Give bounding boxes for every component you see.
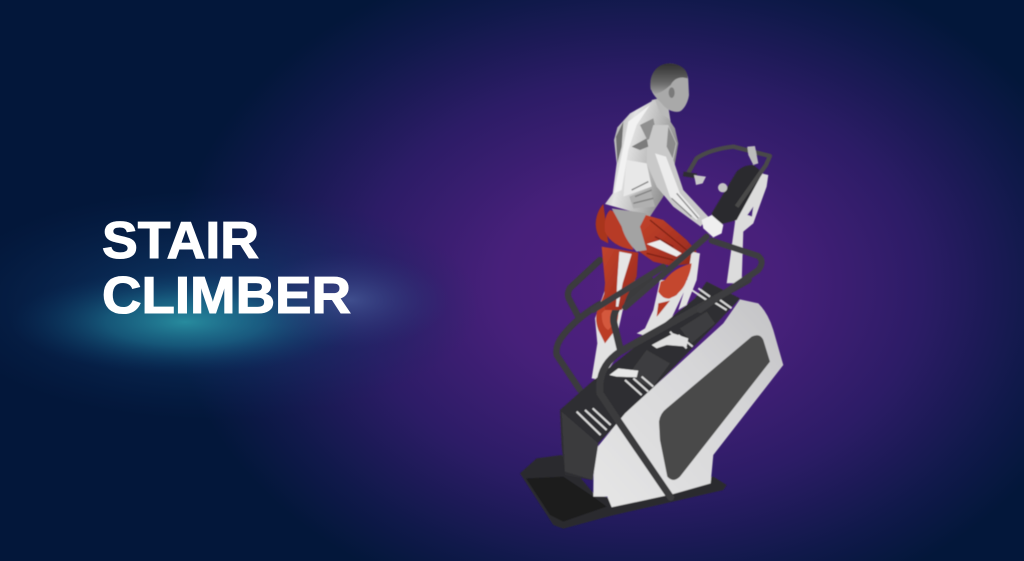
lower front leg	[637, 279, 695, 337]
hand	[702, 215, 723, 237]
head	[651, 63, 689, 112]
rear thigh tendon	[616, 252, 632, 307]
cutout in frame	[747, 207, 753, 217]
grip end	[694, 175, 706, 185]
mid step pads	[628, 312, 715, 388]
athlete upper body	[596, 63, 723, 310]
foot on upper step	[652, 333, 688, 348]
machine	[526, 282, 783, 522]
rear handrail	[556, 260, 650, 390]
back muscles	[614, 105, 657, 208]
console post and console	[683, 146, 770, 283]
step tread stripes	[577, 288, 732, 435]
console frame	[727, 173, 768, 283]
shell	[593, 299, 783, 507]
machine base	[520, 455, 727, 529]
ear	[669, 87, 675, 98]
torso	[605, 99, 678, 217]
calf	[660, 263, 692, 297]
console screen	[712, 165, 763, 224]
step block	[560, 282, 740, 480]
hair	[650, 63, 688, 94]
shoulder and arm	[647, 125, 708, 227]
knob	[718, 183, 727, 192]
front thigh	[639, 213, 697, 266]
foot on lower step	[609, 368, 638, 377]
title: CLIMBER	[102, 267, 351, 325]
side grip	[683, 174, 697, 176]
title: STAIR	[102, 212, 259, 270]
handlebar bracket	[747, 146, 758, 165]
rear thigh	[602, 247, 638, 310]
knee	[678, 252, 700, 310]
front ramp	[526, 477, 607, 522]
glow behind title	[0, 170, 540, 440]
front handrail	[600, 280, 748, 497]
front diagonal rail over legs	[593, 237, 762, 310]
lower rear leg	[592, 280, 635, 380]
thigh tendon	[647, 240, 682, 257]
side panel	[659, 335, 770, 480]
neck	[652, 97, 671, 122]
upper handlebar	[688, 147, 770, 207]
glute	[605, 210, 633, 250]
illustration: athlete on stair climber	[520, 63, 783, 529]
step side teeth	[562, 412, 598, 480]
rear glute	[596, 204, 608, 243]
hip band	[612, 208, 647, 252]
thigh striations	[647, 220, 687, 260]
title	[102, 212, 351, 325]
